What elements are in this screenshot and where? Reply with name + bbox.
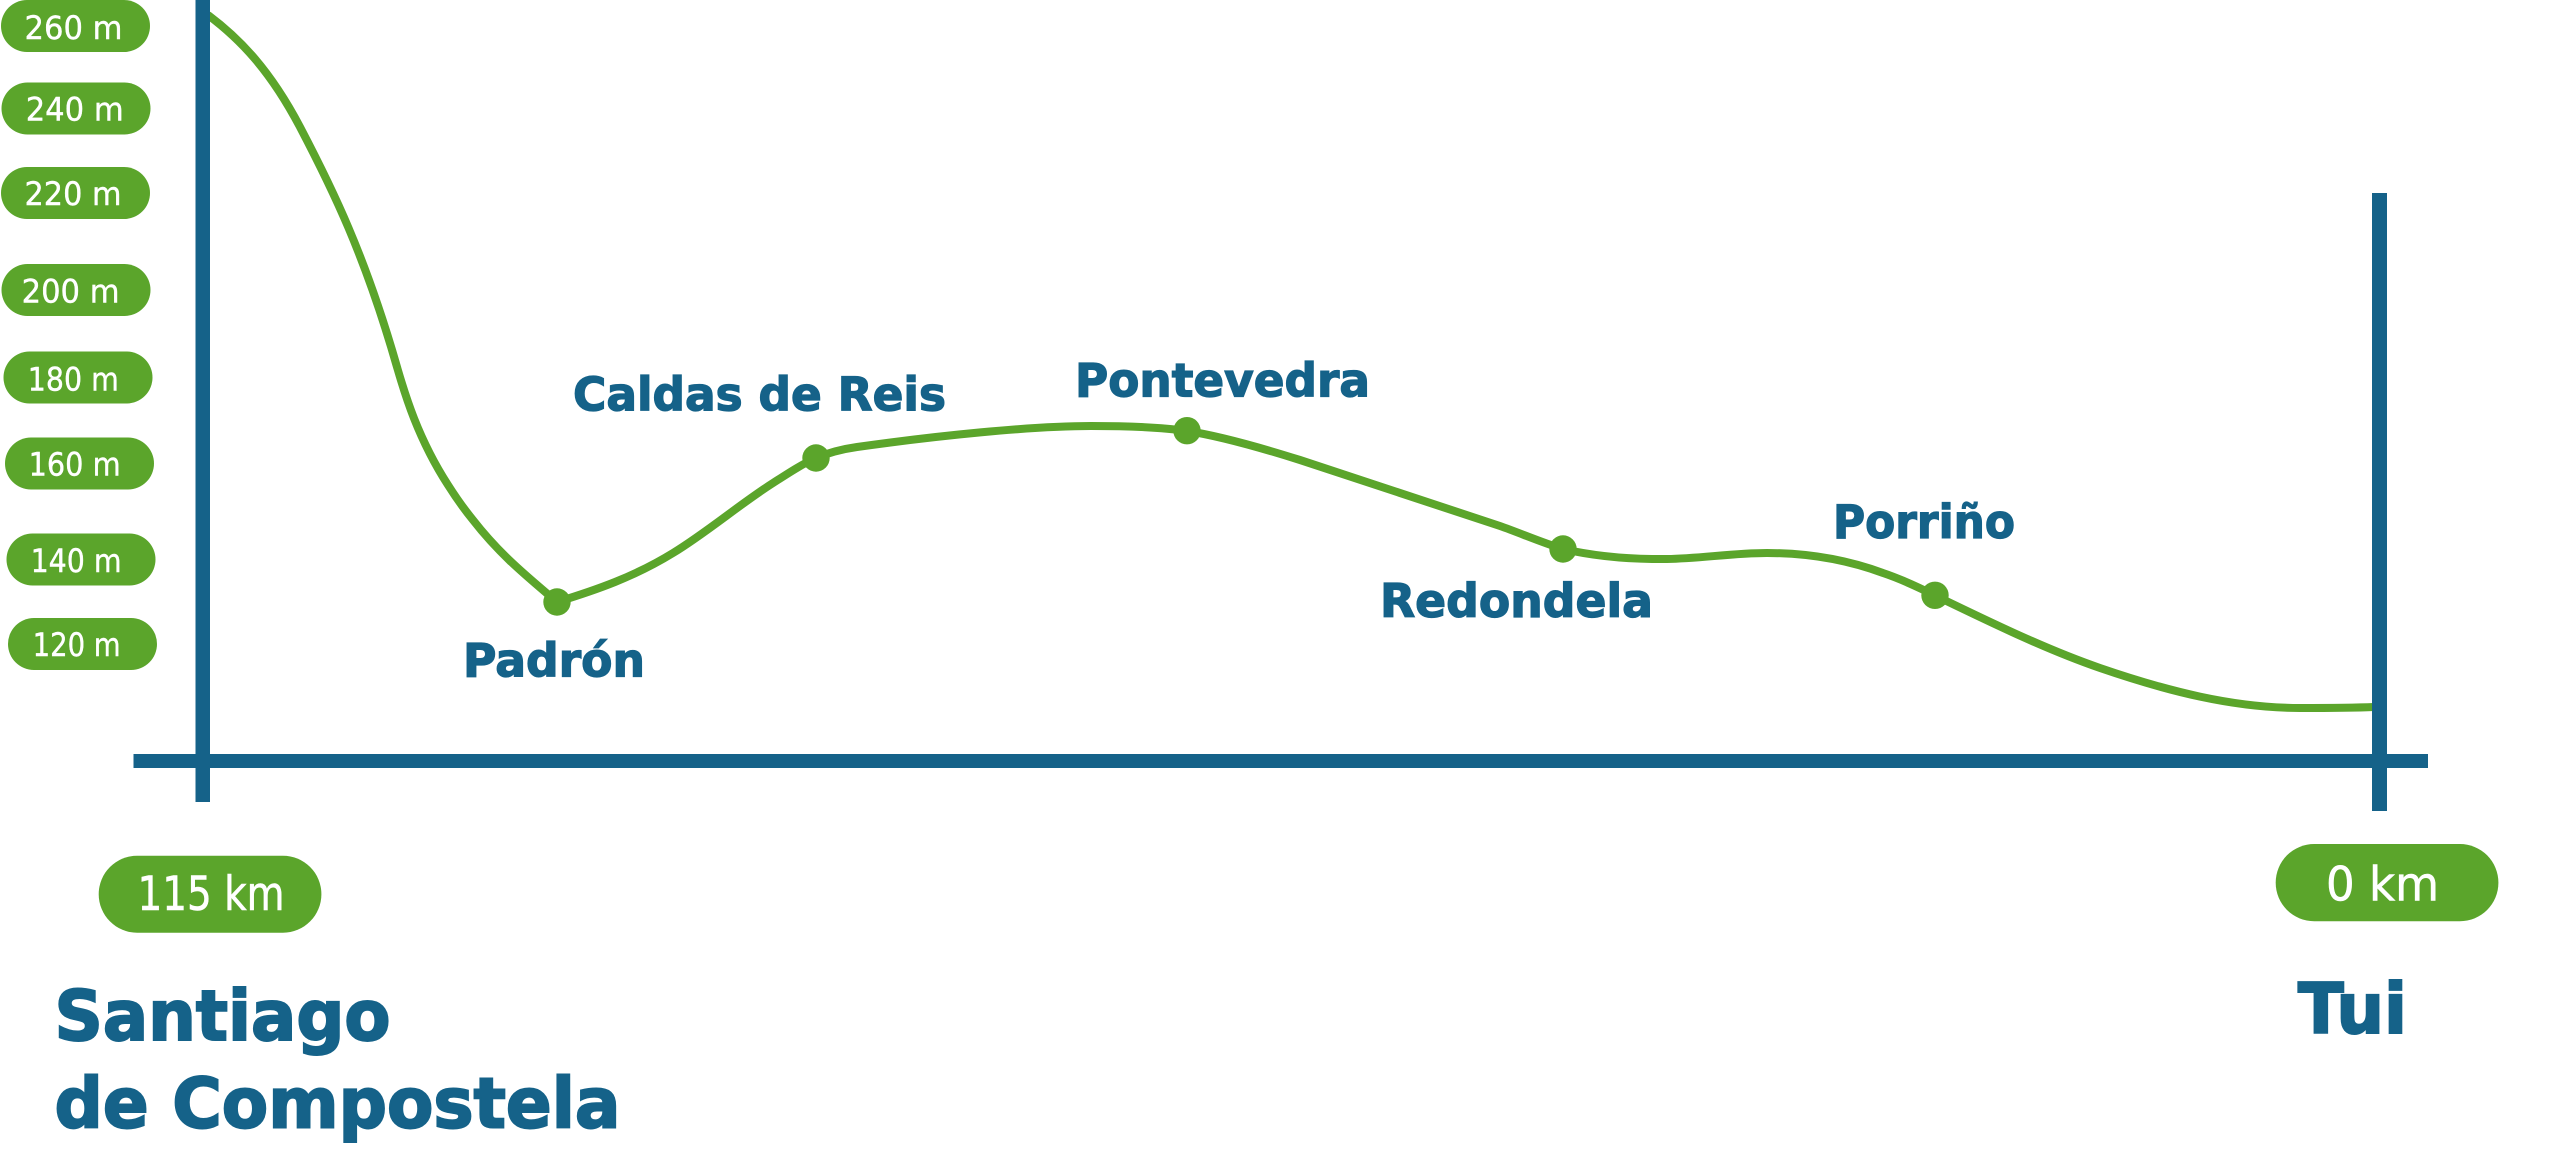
distance pill: 115 km: 115 km [138,867,284,922]
stop marker: Caldas de Reis [802,444,830,472]
stop marker: Padrón [543,588,571,616]
altitude pill: 260 m: 260 m [24,9,122,47]
elevation profile line [208,15,2374,708]
stop label: Pontevedra: Pontevedra [1075,354,1370,408]
altitude pill: 180 m [4,352,152,404]
altitude pill: 120 m [8,618,157,670]
altitude pill: 160 m: 160 m [29,445,121,483]
left vertical axis [196,0,210,802]
stop marker: Porriño [1921,582,1949,609]
altitude pill: 140 m [6,534,156,586]
stop label: Redondela: Redondela [1380,574,1653,628]
end place heading: Tui: Tui [2298,969,2407,1050]
distance pill: 0 km: 0 km [2326,858,2439,913]
altitude pill: 160 m [5,438,154,490]
altitude pill: 220 m: 220 m [24,175,122,213]
stop label: Padrón: Padrón [463,634,645,688]
altitude scale pills [1,0,157,670]
altitude pill: 240 m [2,82,150,134]
start place heading: Santiago de Compostela: de Compostela [54,1064,620,1145]
start place heading: Santiago de Compostela [54,976,620,1145]
altitude pill: 180 m: 180 m [28,361,119,399]
altitude pill: 200 m: 200 m [22,273,120,311]
distance pill: 0 km [2276,844,2498,921]
stop marker: Pontevedra [1173,417,1201,444]
distance pill: 115 km [99,856,321,933]
altitude pill: 140 m: 140 m [31,542,122,580]
altitude pill: 200 m [2,264,150,316]
altitude pill: 220 m [1,167,150,219]
altitude pill: 120 m: 120 m [33,626,121,664]
stop marker: Redondela [1549,535,1577,563]
right vertical axis [2372,193,2387,811]
altitude pill: 260 m [1,0,150,52]
altitude pill: 240 m: 240 m [26,90,124,128]
stop label: Caldas de Reis: Caldas de Reis [573,368,946,422]
start place heading: Santiago de Compostela: Santiago [54,976,390,1057]
stop label: Porriño: Porriño [1833,495,2015,549]
horizontal distance axis [134,754,2428,768]
